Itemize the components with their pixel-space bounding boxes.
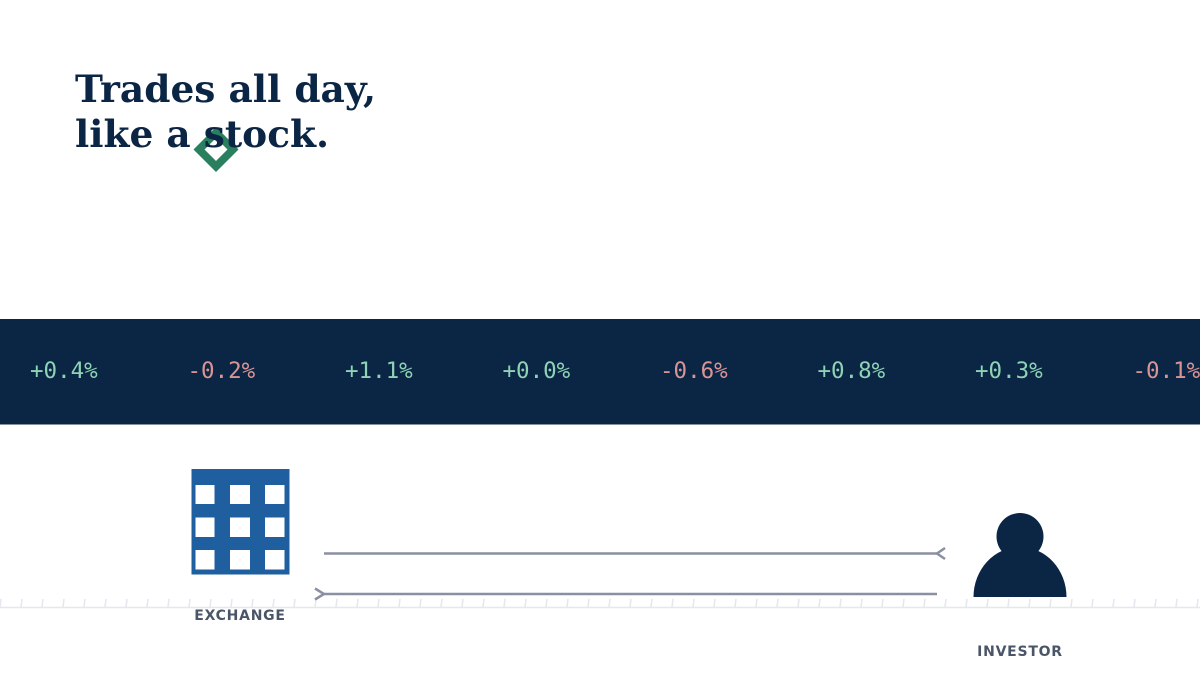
label: investor: INVESTOR (977, 644, 1063, 660)
ticker values: +0.0% (502, 358, 571, 384)
ticker values: -0.6% (660, 358, 728, 384)
icon: investor person (974, 513, 1066, 597)
label: exchange: EXCHANGE (194, 608, 286, 624)
arrow: exchange to investor lower line (315, 588, 937, 600)
ticker values: +0.3% (975, 358, 1043, 384)
ticker band (0, 319, 1200, 424)
title (75, 67, 376, 156)
ground line with ticks (0, 599, 1200, 608)
icon: green diamond (199, 132, 233, 166)
title: Trades all day, (75, 67, 376, 111)
icon: exchange building (192, 469, 290, 574)
ticker values: -0.1% (1132, 358, 1200, 384)
ticker values (30, 358, 1200, 384)
ticker values: +0.8% (818, 358, 886, 384)
ticker values: +1.1% (345, 358, 413, 384)
arrow: investor to exchange upper line (324, 548, 945, 559)
ticker values: -0.2% (188, 358, 256, 384)
title: like a stock. (75, 112, 329, 156)
ticker values: +0.4% (30, 358, 98, 384)
